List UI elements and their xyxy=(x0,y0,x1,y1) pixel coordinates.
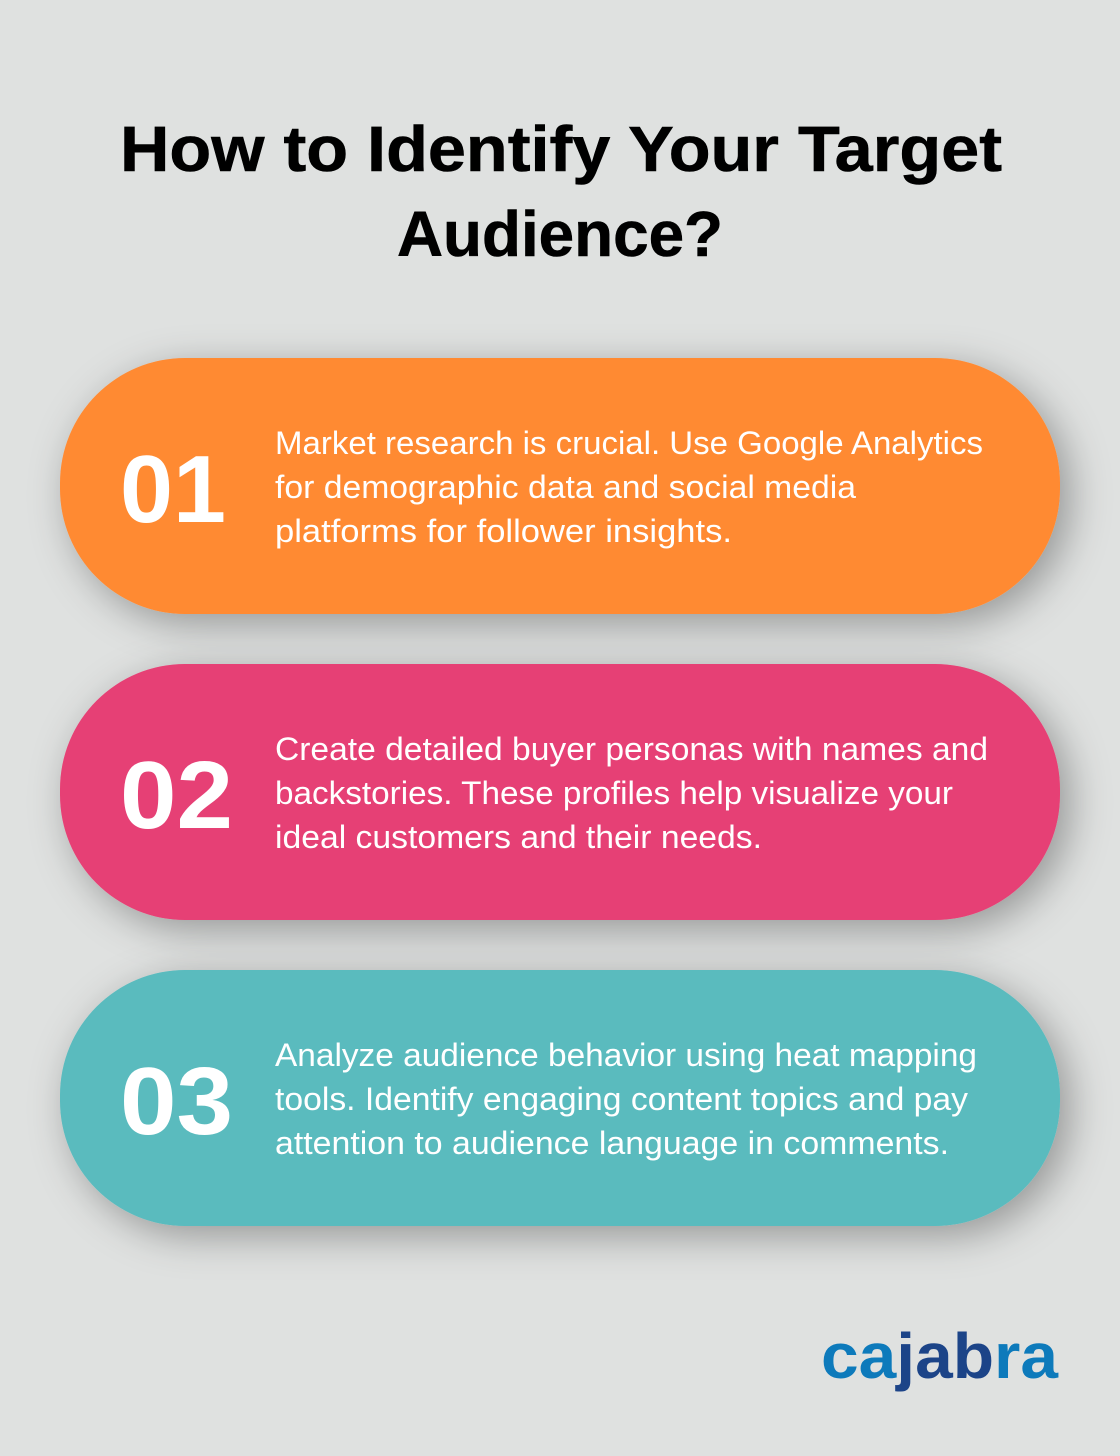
text: step 03 description: attention to audience language in comments. xyxy=(275,1125,949,1161)
number 03: 03 xyxy=(120,1048,233,1155)
text: step 01 description: for demographic data and social media xyxy=(275,469,856,505)
text: step 02 description: backstories. These profiles help visualize your xyxy=(275,775,953,811)
number 02: 02 xyxy=(120,742,233,849)
text: step 02 description: Create detailed buyer personas with names and xyxy=(275,731,988,767)
title: Audience? xyxy=(397,198,723,270)
text: step 01 description xyxy=(275,425,983,549)
text: step 02 description xyxy=(275,731,988,855)
number 01: 01 xyxy=(120,436,226,543)
text: step 03 description: tools. Identify engaging content topics and pay xyxy=(275,1081,968,1117)
title: How to Identify Your Target xyxy=(120,113,1002,185)
panel: step 03 xyxy=(60,970,1060,1226)
text: step 02 description: ideal customers and their needs. xyxy=(275,819,762,855)
text: step 01 description: Market research is crucial. Use Google Analytics xyxy=(275,425,983,461)
title xyxy=(120,113,1002,270)
logo: cajabra: cajabra xyxy=(821,1320,1058,1392)
text: step 03 description xyxy=(275,1037,977,1161)
panel: step 01 xyxy=(60,358,1060,614)
text: step 01 description: platforms for follower insights. xyxy=(275,513,732,549)
panel: step 02 xyxy=(60,664,1060,920)
text: step 03 description: Analyze audience behavior using heat mapping xyxy=(275,1037,977,1073)
